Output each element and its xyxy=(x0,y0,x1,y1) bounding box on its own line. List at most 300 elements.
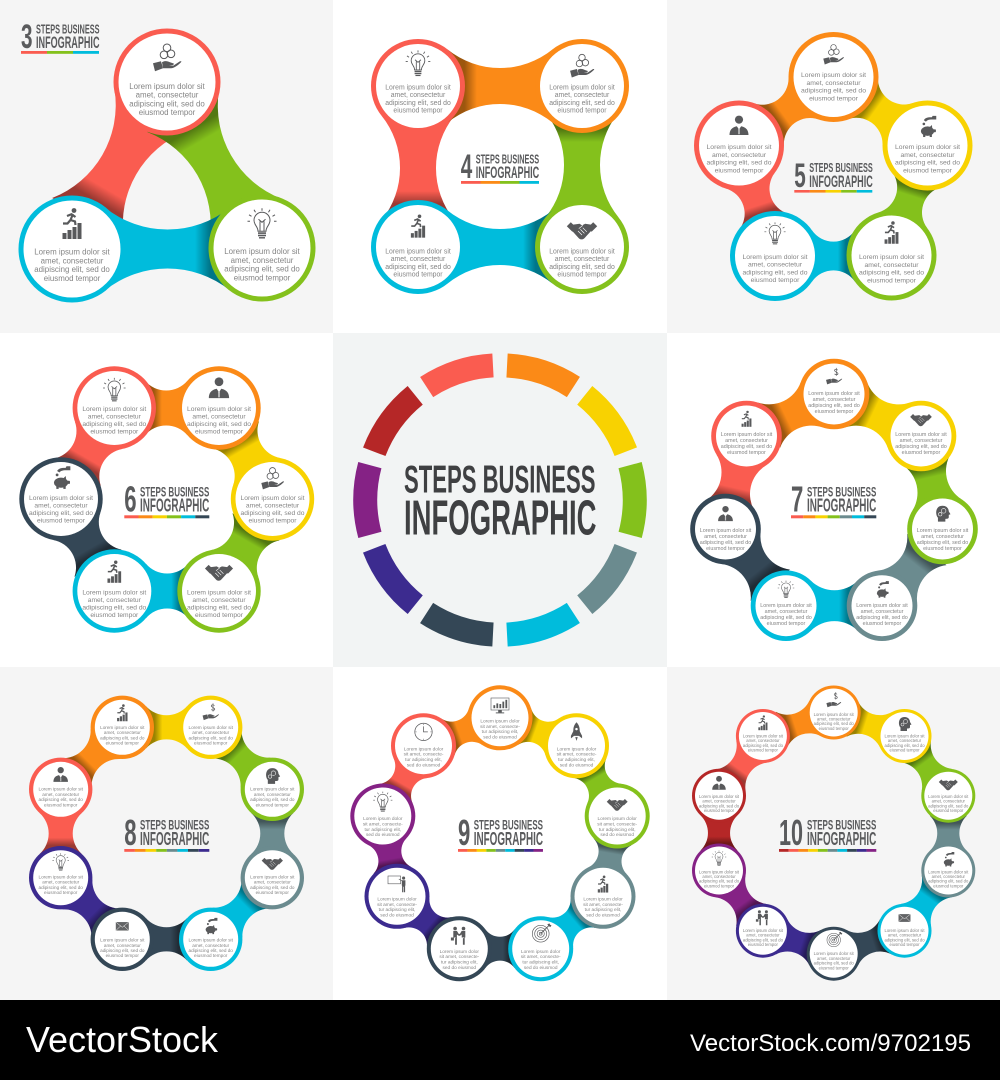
title: 9 steps: INFOGRAPHIC xyxy=(474,829,543,849)
icon: hand with dollar xyxy=(203,703,219,720)
text block: amet, consectetur xyxy=(900,438,943,444)
text block: amet, consectetur xyxy=(813,397,856,403)
text block: tur adipiscing elit, xyxy=(405,757,442,763)
title: 10 steps xyxy=(779,812,876,853)
text block: Lorem ipsum dolor sit xyxy=(224,247,301,256)
text block: eiusmod tempor xyxy=(706,546,745,552)
step circle: cyan xyxy=(730,211,820,301)
text block: amet, consectetur xyxy=(932,874,966,879)
text block: Lorem ipsum dolor sit xyxy=(29,495,93,502)
colour bar xyxy=(124,849,209,852)
text block: tur adipiscing elit, xyxy=(599,827,636,833)
title: 8 steps: INFOGRAPHIC xyxy=(140,829,209,849)
step circle: orange xyxy=(468,685,532,750)
icon: person xyxy=(712,776,726,790)
band: navy xyxy=(721,533,790,601)
title: 4 steps xyxy=(461,148,539,186)
band: green xyxy=(573,758,621,803)
text block: eiusmod tempor xyxy=(867,277,917,284)
text block: amet, consectetur xyxy=(254,792,291,797)
icon: hand with gears xyxy=(823,45,844,64)
text block: amet, consectetur xyxy=(725,438,768,444)
band: green xyxy=(147,91,281,240)
text block: amet, consectetur xyxy=(136,91,199,100)
text block: adipiscing elit, sed do xyxy=(385,264,451,271)
band: yellow xyxy=(848,78,913,145)
text block: amet, consectetur xyxy=(555,256,610,263)
text block: eiusmod tempor xyxy=(37,518,86,524)
text block: Lorem ipsum dolor sit xyxy=(82,406,146,413)
icon: hand with gears xyxy=(153,44,181,71)
text block: Lorem ipsum dolor sit xyxy=(801,72,866,79)
text block: adipiscing elit, sed do xyxy=(917,540,968,546)
text block: amet, consectetur xyxy=(104,730,141,735)
text block: Lorem ipsum dolor sit xyxy=(187,590,251,596)
icon: runner xyxy=(742,411,751,427)
text block: adipiscing elit, sed do xyxy=(224,265,300,274)
text block: sed do eiusmod xyxy=(483,734,517,740)
icon: hand with dollar xyxy=(826,368,842,384)
text block: amet, consectetur xyxy=(555,92,610,99)
text block: adipiscing elit, sed do xyxy=(760,615,812,621)
text block: amet, consectetur xyxy=(702,874,736,879)
text block: adipiscing elit, sed do xyxy=(129,99,205,108)
icon: piggy bank xyxy=(206,918,217,934)
text block: eiusmod tempor xyxy=(194,953,228,958)
icon: handshake xyxy=(262,858,283,870)
step circle: navy xyxy=(807,927,861,981)
text block: amet, consectetur xyxy=(748,262,803,269)
text block: eiusmod tempor xyxy=(90,428,139,436)
band: yellow xyxy=(518,709,559,755)
text block: amet, consectetur xyxy=(88,597,142,604)
text block: sed do eiusmod xyxy=(366,832,400,838)
icon: hand with gears xyxy=(261,468,284,489)
text block: amet, consectetur xyxy=(254,880,291,885)
text block: amet, consectetur xyxy=(921,534,964,540)
text block: eiusmod tempor xyxy=(889,942,920,947)
title: 5 steps: STEPS BUSINESS xyxy=(809,160,873,175)
text block: eiusmod tempor xyxy=(902,450,941,456)
text block: eiusmod tempor xyxy=(727,450,766,456)
step circle: gray xyxy=(847,570,917,641)
band: cyan xyxy=(548,898,595,947)
icon: handshake xyxy=(939,780,958,790)
band: indigo xyxy=(776,919,821,965)
text block: Lorem ipsum dolor sit xyxy=(189,938,234,943)
text block: adipiscing elit, sed do xyxy=(801,88,866,95)
title: 9 steps xyxy=(458,812,543,853)
text block: adipiscing elit, sed do xyxy=(39,797,83,802)
text block: sit amet, consecte- xyxy=(583,902,623,908)
text block: amet, consectetur xyxy=(104,943,141,948)
icon: bulb xyxy=(712,850,726,866)
text block: eiusmod tempor xyxy=(557,107,607,114)
text block: adipiscing elit, sed do xyxy=(82,604,147,612)
icon: runner xyxy=(411,214,425,238)
band: dark red xyxy=(700,815,738,851)
icon: target xyxy=(532,924,552,942)
footer bar xyxy=(0,1000,1000,1080)
text block: amet, consectetur xyxy=(704,534,747,540)
title: 5 steps: 5 xyxy=(794,157,806,195)
icon: bulb xyxy=(406,50,430,76)
text block: eiusmod tempor xyxy=(923,546,962,552)
title: 10 steps: STEPS BUSINESS xyxy=(807,816,876,832)
step circle: navy xyxy=(427,916,492,981)
step circle: green xyxy=(208,194,316,302)
icon: bulb xyxy=(764,222,786,244)
text block: adipiscing elit, sed do xyxy=(549,100,615,107)
icon: envelope xyxy=(899,914,910,922)
colour bar xyxy=(461,181,539,184)
text block: eiusmod tempor xyxy=(393,271,443,278)
text block: adipiscing elit, sed do xyxy=(385,100,451,107)
text block: sed do eiusmod xyxy=(600,832,634,838)
band: indigo xyxy=(405,898,452,947)
text block: adipiscing elit, sed do xyxy=(187,421,251,428)
band: indigo xyxy=(62,879,122,939)
title: 5 steps: INFOGRAPHIC xyxy=(809,172,873,191)
text block: eiusmod tempor xyxy=(256,890,289,895)
icon: piggy bank xyxy=(877,581,889,598)
text block: adipiscing elit, sed do xyxy=(189,948,233,953)
step circle: orange xyxy=(91,696,154,759)
step circle: orange xyxy=(799,359,869,429)
step circle: cyan xyxy=(751,570,821,641)
text block: amet, consectetur xyxy=(391,92,446,99)
icon: presenter xyxy=(388,876,405,892)
text block: eiusmod tempor xyxy=(106,740,139,745)
text block: Lorem ipsum dolor sit xyxy=(895,144,960,151)
text block: amet, consectetur xyxy=(817,716,851,722)
text block: Lorem ipsum dolor xyxy=(480,718,520,724)
text block: sit amet, consecte- xyxy=(377,902,417,908)
text block: amet, consectetur xyxy=(806,80,861,87)
text block: adipiscing elit, sed do xyxy=(743,937,784,942)
text block: tur adipiscing elit, xyxy=(522,960,559,966)
text block: amet, consectetur xyxy=(746,738,780,743)
step circle: cyan xyxy=(371,200,465,294)
text block: amet, consectetur xyxy=(41,256,104,265)
band: cyan xyxy=(448,210,552,284)
text block: amet, consectetur xyxy=(888,933,922,938)
band: red xyxy=(716,741,766,791)
text block: tur adipiscing elit, xyxy=(441,960,478,966)
text block: eiusmod tempor xyxy=(195,428,244,436)
text block: adipiscing elit, sed do xyxy=(808,403,860,409)
step circle: green xyxy=(241,758,304,821)
text block: adipiscing elit, sed do xyxy=(549,264,615,271)
band: navy xyxy=(485,929,515,968)
title: 3 steps xyxy=(21,18,100,56)
text block: Lorem ipsum dolor sit xyxy=(549,248,615,255)
text block: Lorem ipsum dolor sit xyxy=(917,528,969,534)
icon: two people xyxy=(451,927,465,945)
title: 9 steps: 9 xyxy=(458,812,470,853)
band: cyan xyxy=(812,230,855,282)
text block: Lorem ipsum dolor sit xyxy=(187,406,251,413)
text block: amet, consectetur xyxy=(932,799,966,804)
icon: monitor chart xyxy=(491,698,509,713)
text block: Lorem ipsum dolor sit xyxy=(82,590,146,596)
text block: Lorem ipsum dolor sit xyxy=(385,248,451,255)
title: 3 steps: STEPS BUSINESS xyxy=(36,21,100,36)
text block: eiusmod tempor xyxy=(809,95,859,102)
band: cyan xyxy=(105,208,230,290)
band: yellow xyxy=(847,701,892,748)
text block: adipiscing elit, sed do xyxy=(82,421,147,428)
step circle: green xyxy=(535,200,629,294)
step circle: yellow xyxy=(886,401,956,471)
text block: amet, consectetur xyxy=(246,502,300,510)
text block: amet, consectetur xyxy=(900,152,955,159)
icon: bulb xyxy=(373,792,392,812)
title: 7 steps xyxy=(791,478,876,520)
icon: head with gears xyxy=(266,768,280,784)
title: 10 steps: 10 xyxy=(779,812,803,853)
text block: amet, consectetur xyxy=(192,943,230,948)
text block: eiusmod tempor xyxy=(715,167,764,174)
text block: amet, consectetur xyxy=(861,609,904,615)
title: 8 steps xyxy=(124,812,209,853)
step circle: gray xyxy=(241,846,304,909)
icon: runner xyxy=(107,561,121,583)
text block: Lorem ipsum dolor sit xyxy=(884,734,925,738)
text block: adipiscing elit, sed do xyxy=(895,160,960,167)
text block: eiusmod tempor xyxy=(863,621,902,627)
text block: adipiscing elit, sed do xyxy=(814,961,854,966)
band: green xyxy=(901,740,952,791)
text block: Lorem ipsum dolor sit xyxy=(241,495,305,502)
text block: Lorem ipsum dolor sit xyxy=(707,144,772,151)
text block: Lorem ipsum dolor sit xyxy=(928,794,969,799)
ring segments xyxy=(349,348,651,652)
text block: eiusmod tempor xyxy=(256,802,289,807)
text block: eiusmod tempor xyxy=(44,802,78,807)
text block: sit amet, consecte- xyxy=(363,822,403,828)
text block: adipiscing elit, sed do xyxy=(895,444,947,450)
band: red xyxy=(52,90,186,239)
text block: Lorem ipsum dolor xyxy=(377,896,417,902)
band: cyan xyxy=(146,564,188,618)
text block: adipiscing elit, sed do xyxy=(250,797,295,802)
title: 9 steps: STEPS BUSINESS xyxy=(474,816,543,832)
text block: eiusmod tempor xyxy=(933,808,964,813)
text block: eiusmod tempor xyxy=(90,612,139,619)
step circle: yellow xyxy=(882,100,972,190)
text block: adipiscing elit, sed do xyxy=(699,879,740,884)
step circle: indigo xyxy=(29,846,92,909)
text block: Lorem ipsum dolor sit xyxy=(189,725,234,730)
colour bar xyxy=(791,515,876,518)
text block: Lorem ipsum dolor xyxy=(583,896,623,902)
band: green xyxy=(211,728,271,788)
band: orange xyxy=(145,381,187,435)
colour bar xyxy=(21,51,99,54)
text block: Lorem ipsum dolor sit xyxy=(700,528,752,534)
step circle: purple xyxy=(350,784,415,848)
band: cyan xyxy=(811,581,858,631)
band: green xyxy=(902,453,961,510)
text block: Lorem ipsum dolor sit xyxy=(250,787,295,792)
icon: person xyxy=(209,377,229,398)
text block: amet, consectetur xyxy=(391,256,446,263)
band: purple xyxy=(368,838,411,874)
text block: Lorem ipsum dolor sit xyxy=(814,951,855,956)
text block: eiusmod tempor xyxy=(933,883,964,888)
band: cyan xyxy=(212,878,272,938)
text block: amet, consectetur xyxy=(42,880,80,885)
text block: sed do eiusmod xyxy=(586,912,620,918)
icon: handshake xyxy=(567,222,597,239)
icon: runner xyxy=(117,704,128,721)
band: red xyxy=(40,813,82,854)
text block: adipiscing elit, sed do xyxy=(742,269,808,276)
band: red xyxy=(379,759,427,803)
text block: eiusmod tempor xyxy=(106,953,139,958)
band: gray xyxy=(251,813,294,854)
step circle: cyan xyxy=(878,904,932,958)
icon: rocket xyxy=(571,722,582,741)
text block: Lorem ipsum dolor xyxy=(404,746,444,752)
title: 4 steps: STEPS BUSINESS xyxy=(476,152,539,166)
title: 6 steps: INFOGRAPHIC xyxy=(140,496,209,516)
step circle: orange xyxy=(788,32,878,122)
text block: adipiscing elit, sed do xyxy=(187,604,251,612)
text block: Lorem ipsum dolor sit xyxy=(895,432,947,438)
step circle: gray xyxy=(570,864,636,929)
text block: amet, consectetur xyxy=(888,738,922,743)
step circle: red xyxy=(694,100,784,190)
title: 4 steps: INFOGRAPHIC xyxy=(476,163,539,182)
text block: eiusmod tempor xyxy=(393,107,443,114)
panel: 9 steps xyxy=(350,685,650,981)
icon: handshake xyxy=(607,799,628,811)
band: yellow xyxy=(146,706,187,748)
icon: target xyxy=(827,932,842,947)
text block: eiusmod tempor xyxy=(139,108,196,117)
band: gray xyxy=(878,534,946,602)
text block: eiusmod tempor xyxy=(249,518,297,524)
icon: hand with gears xyxy=(570,54,594,78)
icon: two people xyxy=(756,910,768,925)
text block: Lorem ipsum dolor sit xyxy=(250,874,295,879)
text block: Lorem ipsum dolor sit xyxy=(699,794,740,799)
text block: amet, consectetur xyxy=(864,262,919,269)
text block: tur adipiscing elit, xyxy=(482,729,518,735)
band: gray xyxy=(930,816,967,851)
text block: amet, consectetur xyxy=(42,792,80,797)
step circle: red xyxy=(391,713,456,778)
band: purple xyxy=(715,875,766,926)
step circle: orange xyxy=(177,366,261,450)
title: 10 steps: INFOGRAPHIC xyxy=(807,829,876,849)
text block: adipiscing elit, sed do xyxy=(699,803,740,808)
step circle: red xyxy=(371,39,465,133)
text block: adipiscing elit, sed do xyxy=(856,615,908,621)
text block: Lorem ipsum dolor sit xyxy=(721,432,773,438)
text block: eiusmod tempor xyxy=(234,273,291,282)
band: orange xyxy=(61,729,121,788)
step circle: green xyxy=(907,494,978,564)
text block: sed do eiusmod xyxy=(407,762,441,768)
text block: adipiscing elit, sed do xyxy=(241,510,305,517)
text block: Lorem ipsum dolor sit xyxy=(100,725,145,730)
text block: Lorem ipsum dolor sit xyxy=(743,254,808,261)
step circle: green xyxy=(585,784,650,848)
text block: Lorem ipsum dolor sit xyxy=(884,928,925,933)
band: red xyxy=(54,422,122,486)
text block: adipiscing elit, sed do xyxy=(250,885,295,890)
text block: eiusmod tempor xyxy=(704,883,735,888)
band: navy xyxy=(146,918,187,960)
step circle: cyan xyxy=(179,908,242,971)
band: green xyxy=(546,113,618,217)
step circle: orange xyxy=(535,39,629,133)
icon: person xyxy=(53,767,68,782)
text block: amet, consectetur xyxy=(746,933,780,938)
band: orange xyxy=(754,78,819,145)
icon: head with gears xyxy=(899,717,912,731)
band: gray xyxy=(589,838,632,874)
text block: amet, consectetur xyxy=(231,256,294,265)
step circle: purple xyxy=(692,844,746,898)
text block: tur adipiscing elit, xyxy=(379,907,415,913)
text block: adipiscing elit, sed do xyxy=(814,721,854,726)
text block: eiusmod tempor xyxy=(44,890,78,895)
text block: sit amet, consecte- xyxy=(597,822,638,828)
band: red xyxy=(706,455,765,512)
text block: adipiscing elit, sed do xyxy=(34,265,110,274)
text block: Lorem ipsum dolor sit xyxy=(699,869,740,874)
text block: eiusmod tempor xyxy=(889,748,920,753)
text block: eiusmod tempor xyxy=(748,748,779,753)
text block: Lorem ipsum dolor sit xyxy=(385,84,451,91)
band: green xyxy=(878,171,941,228)
step circle: red xyxy=(711,401,782,471)
text block: adipiscing elit, sed do xyxy=(743,743,784,748)
text block: eiusmod tempor xyxy=(748,942,779,947)
icon: person xyxy=(730,116,748,135)
text block: sit amet, consecte- xyxy=(521,954,561,960)
panel: 4 steps xyxy=(371,39,629,294)
step circle: navy xyxy=(19,457,103,541)
text block: eiusmod tempor xyxy=(194,740,228,745)
step circle: orange xyxy=(807,686,861,740)
text block: eiusmod tempor xyxy=(819,726,849,731)
band: orange xyxy=(441,709,482,755)
text block: adipiscing elit, sed do xyxy=(29,510,93,517)
icon: runner xyxy=(758,715,767,730)
text block: eiusmod tempor xyxy=(704,808,735,813)
text block: eiusmod tempor xyxy=(44,274,101,283)
title: 7 steps: INFOGRAPHIC xyxy=(807,496,876,516)
icon: hand with dollar xyxy=(826,692,841,707)
step circle: navy xyxy=(690,494,761,564)
text block: eiusmod tempor xyxy=(195,612,244,619)
title: 5 steps xyxy=(794,157,873,195)
icon: piggy bank xyxy=(944,852,954,866)
icon: runner xyxy=(62,208,82,239)
text block: Lorem ipsum dolor sit xyxy=(760,603,812,609)
step circle: gray xyxy=(921,844,975,898)
text block: Lorem ipsum dolor sit xyxy=(34,248,111,256)
title: 6 steps: STEPS BUSINESS xyxy=(140,483,209,499)
text block: amet, consectetur xyxy=(702,799,736,804)
title: 8 steps: 8 xyxy=(124,812,137,853)
icon: head with gears xyxy=(936,506,950,522)
